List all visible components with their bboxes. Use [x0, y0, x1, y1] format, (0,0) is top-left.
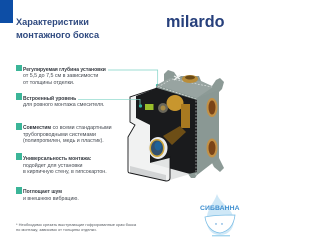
title [16, 17, 100, 40]
text: item 4: Универсальность монтажа: [23, 156, 91, 162]
bullet 4 [16, 153, 22, 160]
title: монтажного бокса [16, 30, 99, 40]
footnote: по монтажу, зависимо от толщины отделки. [16, 226, 97, 232]
title: Характеристики [16, 17, 89, 27]
text: item 1 [23, 66, 106, 86]
bullet 2 [16, 93, 22, 100]
connector line 1 [108, 70, 159, 87]
text: item 1: от 5,5 до 7,5 см в зависимости [23, 73, 98, 79]
text: item 5: и внешнюю вибрацию. [23, 196, 79, 202]
bullet 3 [16, 123, 22, 130]
box body [136, 70, 224, 178]
text: item 3: (полипропилен, медь и пластик). [23, 138, 104, 144]
text: item 4: подойдет для установки [23, 162, 82, 168]
text: item 5 [23, 189, 79, 202]
text: item 4: в кирпичную стену, в гипсокартон. [23, 169, 107, 175]
text: item 4 [23, 156, 107, 175]
text: item 1: от толщины отделки. [23, 80, 74, 86]
logo: milardo: milardo [166, 12, 224, 30]
text: item 2 [23, 96, 105, 108]
product illustration: mounting box [78, 70, 236, 236]
clear protective cover [128, 88, 190, 181]
bullet 1 [16, 64, 22, 71]
text: item 5: Поглощает шум [23, 189, 62, 195]
watermark logo: text: СИБВАННА [200, 205, 240, 212]
bullet 5 [16, 187, 22, 194]
text: item 3: трубопроводными системами [23, 132, 96, 138]
footnote: * Необходимо срезать выступающие гофрированные края бокса [16, 222, 136, 226]
connector line 2 [78, 99, 142, 108]
footnote [16, 222, 136, 232]
watermark logo: drop and bowl [205, 194, 235, 236]
text: item 1: Регулируемая глубина установки [23, 67, 106, 73]
text: item 2: Встроенный уровень [23, 96, 76, 102]
text: item 2: для ровного монтажа смесителя. [23, 102, 105, 108]
text: item 3: Совместим со всеми стандартными [23, 125, 112, 131]
text: item 3 [23, 125, 112, 144]
brand corner block [0, 0, 13, 23]
